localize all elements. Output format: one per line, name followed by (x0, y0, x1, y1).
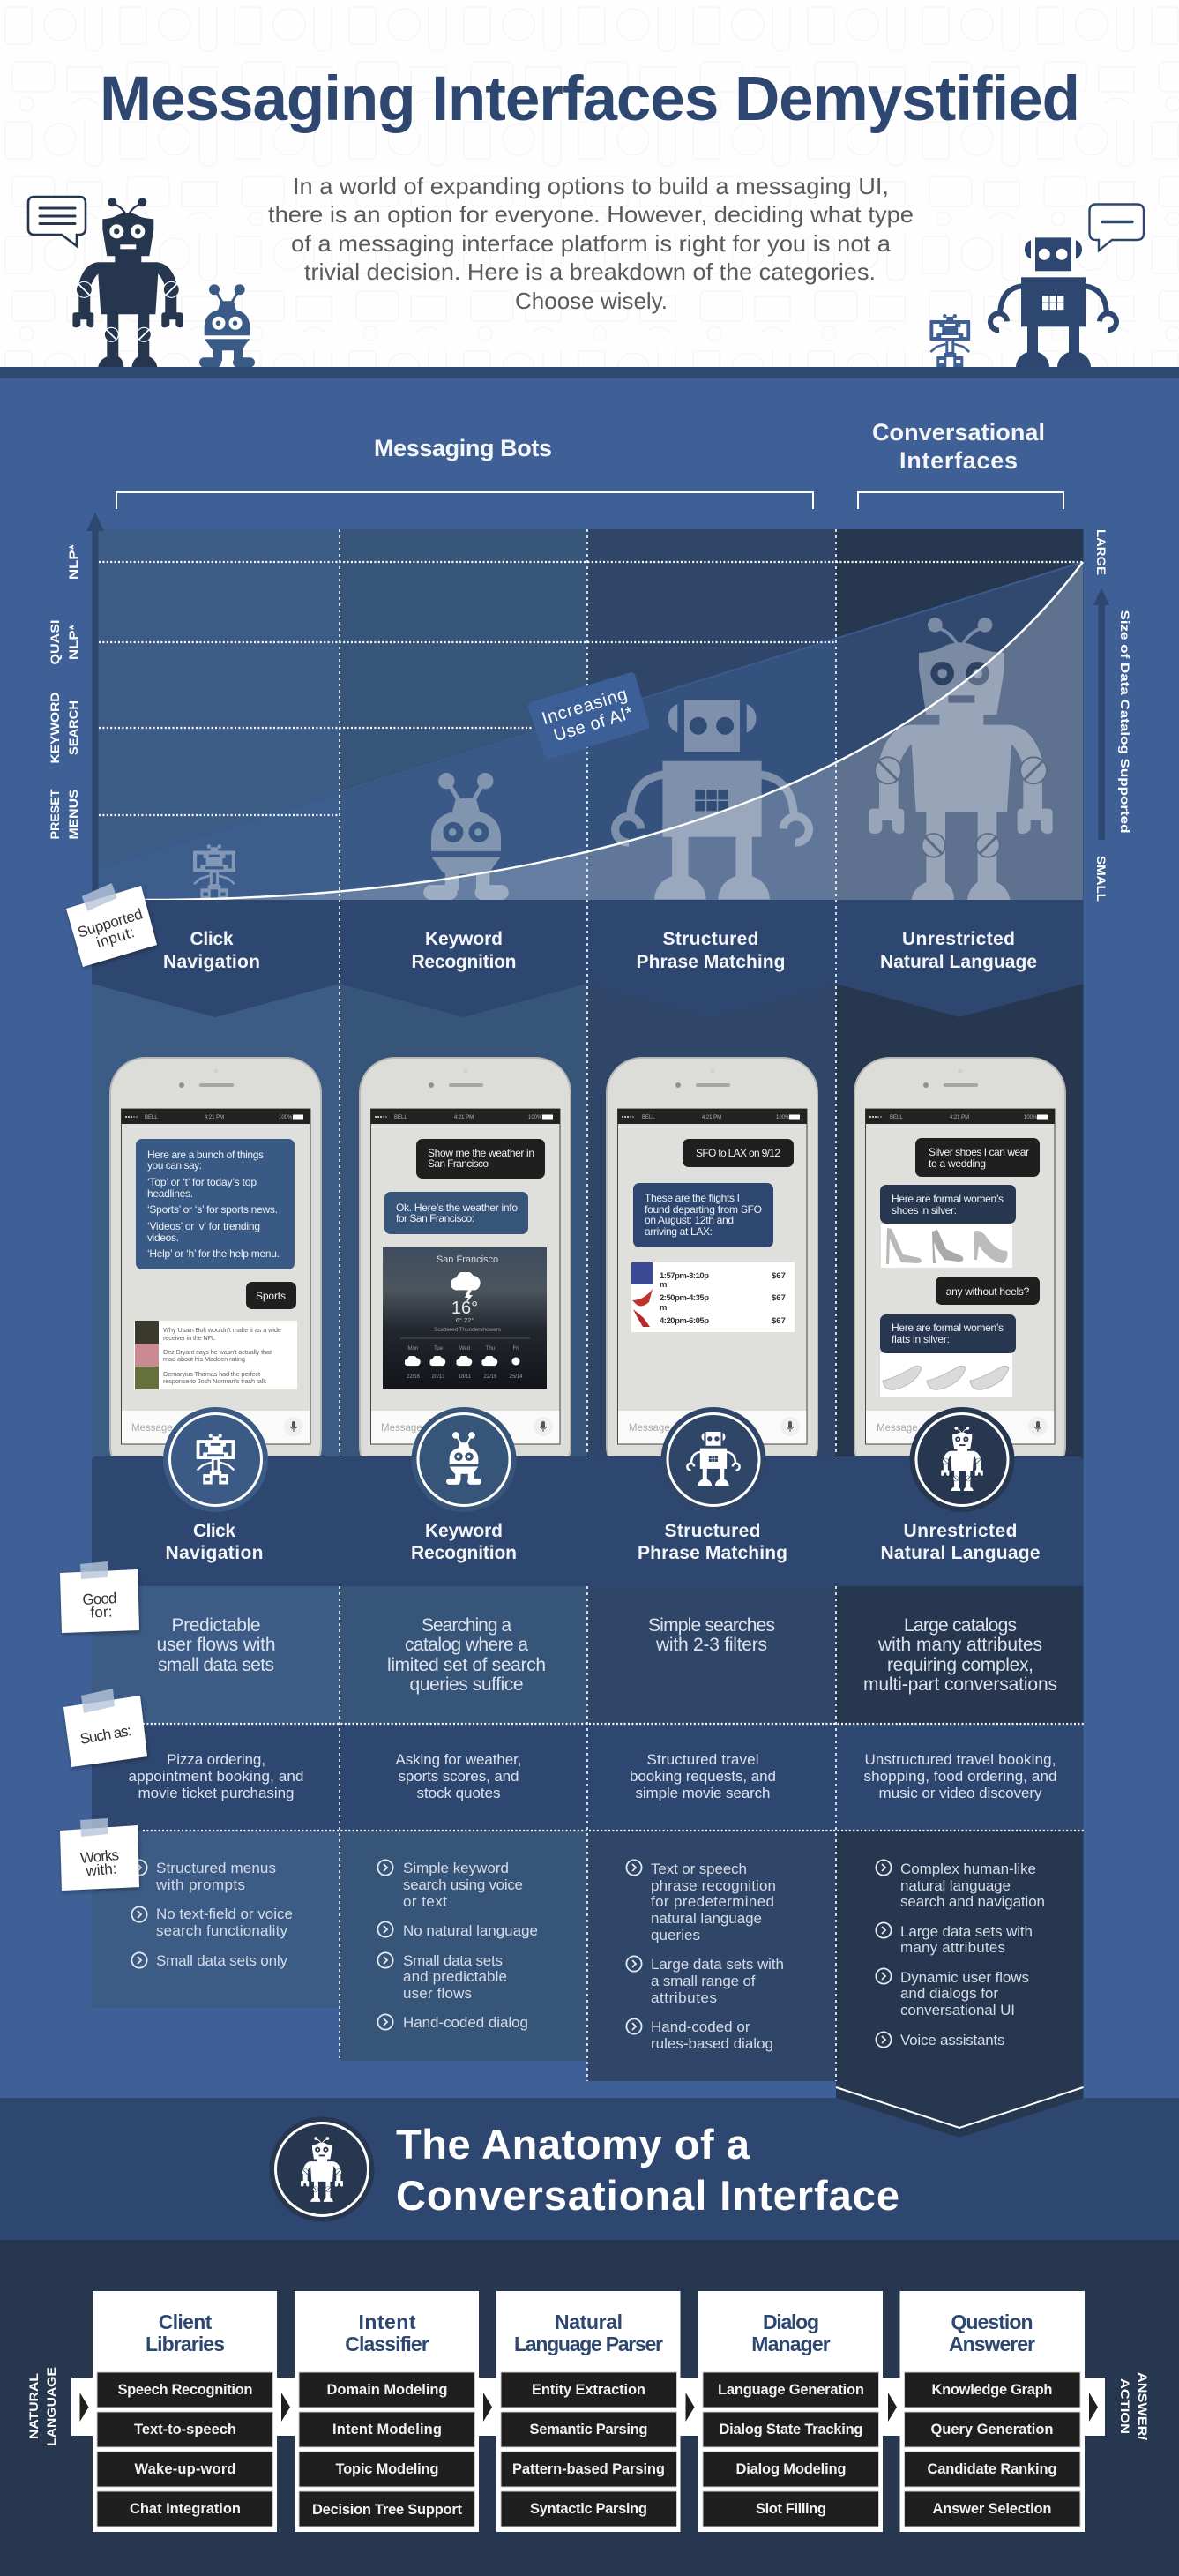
row: such as: sports scores, and (399, 1768, 519, 1785)
weather card: Fri (513, 1346, 519, 1352)
icon: chart robot structured (616, 700, 809, 899)
row: works with, unrestricted natural language (876, 1860, 1045, 2048)
bot message (136, 1139, 295, 1269)
row: works with, click navigation: Small data sets only (156, 1952, 287, 1969)
bot message: These are the flights I (645, 1192, 740, 1204)
phone: unrestricted natural language: BELL (890, 1115, 903, 1120)
weather card: Wed (459, 1346, 470, 1352)
row: works with, click navigation (131, 1860, 293, 1969)
row: works with, keyword recognition: and predictable (403, 1968, 507, 1985)
phone: keyword recognition (360, 1058, 571, 1481)
badge: click navigation (163, 1407, 268, 1512)
flights card (631, 1262, 795, 1332)
such-as band (92, 1724, 1083, 1831)
row: such as (129, 1751, 1056, 1801)
weather card: 25/14 (509, 1374, 523, 1380)
note: works with: Works (79, 1846, 120, 1867)
intro text: trivial decision. Here is a breakdown of the categories. (304, 258, 876, 285)
vertical axis: NLP scale: KEYWORD (48, 692, 62, 764)
intro text: In a world of expanding options to build a messaging UI, (293, 173, 889, 199)
user message: SFO to LAX on 9/12 (696, 1147, 780, 1159)
bot message (880, 1185, 1016, 1224)
phone: click navigation: Message... (131, 1423, 181, 1434)
weather card: 22/16 (407, 1374, 421, 1380)
weather card: Tue (434, 1346, 444, 1352)
phone: unrestricted natural language (854, 1058, 1065, 1481)
phone: keyword recognition: Message... (381, 1423, 430, 1434)
panel: intent classifier: Classifier (345, 2333, 429, 2355)
vertical axis: data catalog size: Size of Data Catalog Supported (1118, 610, 1132, 833)
panel: natural language parser: Semantic Parsing (529, 2422, 647, 2437)
row: works with, keyword recognition: Simple keyword (403, 1860, 509, 1876)
row: works with, keyword recognition: No natural language (403, 1922, 538, 1939)
flights card: $67 (772, 1316, 786, 1326)
panel: question answerer: Answerer (949, 2333, 1035, 2355)
note: supported input: Supported (76, 905, 145, 941)
supported input labels: Unrestricted (902, 929, 1015, 949)
bot message: ‘Sports’ or ‘s’ for sports news. (147, 1203, 278, 1216)
weather card: 20/13 (431, 1374, 445, 1380)
panel: natural language parser: Entity Extraction (532, 2382, 645, 2398)
row: good for: multi-part conversations (863, 1674, 1057, 1695)
news card: Dez Bryant says he wasn't actually that (163, 1348, 272, 1356)
phone: unrestricted natural language: 100% (1024, 1115, 1038, 1120)
news card (134, 1321, 297, 1389)
note: good for: Good (82, 1590, 117, 1608)
note: good for: for: (90, 1603, 113, 1621)
note: such as: Such as: (78, 1722, 133, 1748)
bot message: Ok. Here’s the weather info (396, 1202, 518, 1214)
row: good for: Searching a (422, 1615, 511, 1636)
weather card: 18/11 (459, 1374, 472, 1380)
pipeline connectors (71, 2378, 1105, 2436)
phone: structured phrase matching (607, 1058, 817, 1481)
news card: response to Josh Norman's trash talk (163, 1377, 266, 1385)
panel: question answerer: Candidate Ranking (928, 2461, 1056, 2477)
row: good for: with many attributes (877, 1635, 1042, 1655)
row: works with, click navigation: with prompts (155, 1876, 245, 1893)
row: works with, structured phrase matching: natural language (651, 1910, 762, 1927)
user message: Show me the weather in (428, 1147, 534, 1159)
row: good for: user flows with (157, 1635, 275, 1655)
category labels: Keyword (425, 1521, 503, 1541)
title: Messaging Interfaces Demystified (100, 64, 1080, 134)
bot message (384, 1192, 528, 1234)
intro text (268, 173, 914, 314)
label: answer or action output (1118, 2372, 1150, 2440)
news card: mad about his Madden rating (163, 1355, 245, 1363)
panel: question answerer: Question (951, 2310, 1033, 2333)
category labels: Phrase Matching (638, 1543, 787, 1563)
chevron outline (836, 2087, 1083, 2128)
row: works with, unrestricted natural language: Voice assistants (900, 2032, 1005, 2048)
panel: question answerer: Knowledge Graph (931, 2382, 1053, 2398)
row: good for: queries suffice (409, 1674, 524, 1695)
badge: structured phrase matching (661, 1407, 765, 1512)
bot message (880, 1314, 1016, 1353)
bot message: headlines. (147, 1187, 193, 1200)
icon: chart robot conversational (869, 618, 1053, 900)
vertical axis: NLP scale: SEARCH (66, 700, 80, 755)
panel: natural language parser (496, 2291, 681, 2532)
phone: keyword recognition: BELL (394, 1115, 407, 1120)
increasing AI wedge (92, 562, 1083, 900)
shoes row (880, 1353, 1012, 1397)
intro text: of a messaging interface platform is right for you is not a (291, 230, 892, 257)
user message (915, 1138, 1040, 1177)
row: such as: appointment booking, and (129, 1768, 303, 1785)
panel: intent classifier: Decision Tree Support (312, 2502, 462, 2518)
intro text: Choose wisely. (515, 288, 668, 314)
icon: robot conversational (72, 198, 183, 367)
row: such as: Asking for weather, (395, 1751, 522, 1768)
row: works with, click navigation: No text-field or voice (156, 1906, 293, 1922)
user message: San Francisco (428, 1157, 489, 1170)
row: works with, keyword recognition: or text (403, 1893, 447, 1910)
row: good for: Simple searches (648, 1615, 775, 1636)
bot message: arriving at LAX: (645, 1225, 713, 1238)
row: works with, unrestricted natural language: Dynamic user flows (900, 1969, 1029, 1986)
panel: dialog manager: Dialog State Tracking (720, 2422, 862, 2437)
weather card: Mon (408, 1346, 418, 1352)
row: works with, unrestricted natural language: many attributes (900, 1939, 1005, 1956)
row: works with, structured phrase matching: Text or speech (651, 1861, 747, 1877)
bot message (633, 1183, 773, 1247)
panel: question answerer (899, 2291, 1085, 2532)
flights card: 1:57pm-3:10p (660, 1271, 709, 1281)
category labels: Natural Language (880, 1543, 1041, 1563)
row: good for: requiring complex, (887, 1655, 1033, 1675)
badge: unrestricted natural language (910, 1407, 1014, 1512)
header (0, 0, 1179, 378)
bot message: Here are formal women’s (892, 1193, 1004, 1205)
category labels: Navigation (166, 1543, 263, 1563)
panel: client libraries: Speech Recognition (118, 2382, 252, 2398)
label: natural language input (26, 2367, 58, 2446)
row: works with, unrestricted natural language: conversational UI (900, 2002, 1015, 2018)
panel: natural language parser: Syntactic Parsing (530, 2501, 647, 2517)
row: works with, unrestricted natural language: Large data sets with (900, 1923, 1033, 1940)
vertical axis: NLP scale: QUASI (48, 619, 62, 665)
shoes row (881, 1224, 1012, 1268)
icon: robot click (929, 314, 970, 367)
row: good for: small data sets (158, 1655, 274, 1675)
user message (246, 1282, 296, 1309)
row: such as: shopping, food ordering, and (864, 1768, 1056, 1785)
panel: natural language parser: Language Parser (514, 2333, 663, 2355)
phone: click navigation: BELL (145, 1115, 158, 1120)
note: good for (60, 1561, 139, 1633)
anatomy heading: The Anatomy of a (396, 2121, 750, 2168)
phone: keyword recognition: 100% (528, 1115, 542, 1120)
user message: to a wedding (929, 1157, 986, 1170)
supported input labels: Keyword (425, 929, 503, 949)
panel: dialog manager: Dialog Modeling (735, 2461, 847, 2477)
row: such as: music or video discovery (878, 1785, 1042, 1801)
category labels: Recognition (411, 1543, 517, 1563)
user message: Silver shoes I can wear (929, 1146, 1029, 1158)
weather card (383, 1247, 547, 1389)
row: works with, keyword recognition: user flows (403, 1985, 472, 2002)
note: such as (63, 1689, 147, 1767)
panel: client libraries: Text-to-speech (134, 2422, 236, 2437)
bottom section background (0, 2240, 1179, 2576)
panel: client libraries (93, 2291, 277, 2532)
flights card: m (660, 1303, 667, 1313)
vertical axis: data catalog size: LARGE (1094, 529, 1108, 575)
supported input labels: Click (190, 929, 234, 949)
row: works with, click navigation: Structured menus (156, 1860, 276, 1876)
row: such as: booking requests, and (630, 1768, 776, 1785)
supported input labels: Phrase Matching (637, 952, 785, 972)
label: answer or action output: ANSWER/ (1136, 2372, 1150, 2440)
category labels (166, 1521, 1041, 1563)
category labels: Click (193, 1521, 235, 1541)
bot message: ‘Help’ or ‘h’ for the help menu. (147, 1247, 280, 1260)
panel: natural language parser: Natural (555, 2310, 623, 2333)
heading: conversational interfaces: Interfaces (899, 447, 1018, 474)
band: categories (92, 1456, 1083, 1586)
heading: messaging bots: Messaging Bots (374, 435, 552, 461)
anatomy heading: Conversational Interface (396, 2172, 899, 2219)
icon: speech bubble left (28, 197, 86, 246)
icon: robot structured (990, 237, 1116, 367)
icon: anatomy badge (270, 2117, 374, 2221)
category labels: Unrestricted (903, 1521, 1018, 1541)
icon: chart robot click (193, 844, 235, 900)
row: such as: Structured travel (647, 1751, 758, 1768)
phone: structured phrase matching: Message... (629, 1423, 678, 1434)
heading: messaging bots (116, 435, 813, 509)
news card: receiver in the NFL (163, 1334, 215, 1342)
supported input labels: Navigation (163, 952, 260, 972)
supported input labels (163, 929, 1037, 972)
supported input labels: Recognition (411, 952, 517, 972)
bot message: flats in silver: (892, 1333, 950, 1345)
icon: chart robot keyword (423, 773, 509, 900)
label: answer or action output: ACTION (1118, 2378, 1132, 2434)
row: good for: limited set of search (387, 1655, 546, 1675)
news card: Demaryius Thomas had the perfect (163, 1370, 260, 1378)
supported input labels: Structured (663, 929, 758, 949)
user message (416, 1139, 545, 1179)
vertical axis: NLP scale: PRESET (48, 789, 62, 840)
row: such as: Unstructured travel booking, (864, 1751, 1056, 1768)
row: such as: Pizza ordering, (167, 1751, 265, 1768)
flights card: 4:20pm-6:05p (660, 1316, 709, 1326)
label: increasing use of AI: Use of AI* (551, 703, 636, 745)
category labels: Structured (665, 1521, 760, 1541)
label: natural language input: LANGUAGE (44, 2367, 58, 2446)
row: works with, click navigation: search functionality (156, 1922, 287, 1939)
bot message: for San Francisco: (396, 1212, 474, 1224)
heading: conversational interfaces: Conversational (872, 419, 1045, 446)
phone: unrestricted natural language: 4:21 PM (950, 1115, 969, 1120)
phone: structured phrase matching: 100% (776, 1115, 790, 1120)
user message: any without heels? (946, 1285, 1030, 1298)
row: good for: catalog where a (405, 1635, 528, 1655)
column dividers lower (340, 1586, 836, 2081)
panel: client libraries: Libraries (146, 2333, 225, 2355)
flights card: 2:50pm-4:35p (660, 1293, 709, 1303)
panel: question answerer: Answer Selection (933, 2501, 1051, 2517)
row: works with, keyword recognition (377, 1860, 538, 2031)
row: good for: Predictable (171, 1615, 261, 1636)
flights card: $67 (772, 1293, 786, 1303)
supported input chevrons (92, 900, 1083, 1017)
user message (936, 1277, 1040, 1305)
vertical axis: NLP scale: MENUS (66, 789, 80, 840)
flights card: m (660, 1280, 667, 1290)
panel: client libraries: Chat Integration (130, 2501, 241, 2517)
label: natural language input: NATURAL (26, 2373, 41, 2439)
user message: Sports (256, 1290, 286, 1302)
news card: Why Usain Bolt wouldn't make it as a wide (163, 1326, 281, 1334)
intro text: there is an option for everyone. However, deciding what type (268, 201, 914, 228)
weather card: Thu (486, 1346, 495, 1352)
row: such as: simple movie search (635, 1785, 771, 1801)
row: works with, keyword recognition: Small data sets (403, 1952, 503, 1969)
panel: dialog manager: Slot Filling (756, 2501, 826, 2517)
vertical axis: data catalog size (1093, 529, 1132, 902)
panel: intent classifier: Topic Modeling (335, 2461, 439, 2477)
badge: keyword recognition (411, 1407, 517, 1512)
column panels (92, 529, 1083, 2138)
row: such as: movie ticket purchasing (138, 1785, 295, 1801)
row: works with, structured phrase matching: Large data sets with (651, 1956, 784, 1973)
phone: keyword recognition: 4:21 PM (454, 1115, 474, 1120)
row: works with, keyword recognition: Hand-coded dialog (403, 2014, 528, 2031)
row: works with, structured phrase matching: queries (651, 1927, 700, 1943)
panel: client libraries: Client (159, 2310, 213, 2333)
panel: client libraries: Wake-up-word (134, 2461, 236, 2477)
vertical axis: NLP scale (48, 513, 104, 891)
panel: dialog manager: Dialog (763, 2310, 819, 2333)
icon: speech bubble right (1090, 205, 1144, 251)
user message (683, 1139, 794, 1167)
row: works with, keyword recognition: search using voice (403, 1876, 523, 1893)
phone: click navigation: 4:21 PM (205, 1115, 224, 1120)
phone: unrestricted natural language: Message... (877, 1423, 926, 1434)
growth curve (145, 562, 1083, 900)
panel: natural language parser: Pattern-based Parsing (512, 2461, 665, 2477)
row: works with, unrestricted natural language: and dialogs for (900, 1985, 998, 2002)
weather card: 22/16 (483, 1374, 497, 1380)
bot message: videos. (147, 1232, 179, 1244)
panel: intent classifier (295, 2291, 479, 2532)
row: works with, unrestricted natural language: Complex human-like (900, 1861, 1036, 1877)
weather card: 16° (451, 1299, 478, 1318)
heading: conversational interfaces (858, 419, 1063, 509)
panel: intent classifier: Domain Modeling (326, 2382, 448, 2398)
bot message: ‘Top’ or ‘t’ for today’s top (147, 1176, 257, 1188)
supported input labels: Natural Language (880, 952, 1037, 972)
panel: dialog manager: Language Generation (718, 2382, 864, 2398)
weather card: 6° 22° (456, 1316, 474, 1324)
panel: dialog manager: Manager (751, 2333, 831, 2355)
panel: question answerer: Query Generation (931, 2422, 1053, 2437)
anatomy heading (270, 2117, 899, 2221)
row: works with, structured phrase matching (626, 1860, 784, 2052)
vertical axis: NLP scale: NLP* (66, 624, 80, 660)
anatomy band (0, 2098, 1179, 2240)
note: works with (60, 1818, 139, 1891)
note: supported input (66, 883, 157, 967)
bot message: on August: 12th and (645, 1214, 734, 1226)
bot message: Here are a bunch of things (147, 1149, 264, 1161)
chart: data size vs AI use (92, 562, 1083, 900)
row: such as: stock quotes (416, 1785, 501, 1801)
weather card: San Francisco (437, 1254, 498, 1265)
row: good for: with 2-3 filters (655, 1635, 767, 1655)
phone: structured phrase matching: BELL (642, 1115, 655, 1120)
label: increasing use of AI: Increasing (540, 685, 630, 729)
ground bar (0, 367, 1179, 378)
vertical axis: data catalog size: SMALL (1094, 856, 1108, 902)
label: increasing use of AI (528, 672, 649, 759)
bot message: found departing from SFO (645, 1203, 762, 1216)
icon: robot keyword (199, 284, 255, 367)
note: supported input: input: (94, 924, 137, 951)
bot message: Here are formal women’s (892, 1322, 1004, 1334)
panel: intent classifier: Intent Modeling (332, 2422, 442, 2437)
row: good for: Large catalogs (904, 1615, 1017, 1636)
phone: click navigation: 100% (279, 1115, 293, 1120)
phone: structured phrase matching: 4:21 PM (702, 1115, 721, 1120)
row: works with, structured phrase matching: a small range of (651, 1973, 756, 1989)
bot message: you can say: (147, 1159, 202, 1172)
row: works with, structured phrase matching: for predetermined (651, 1893, 774, 1910)
panel: intent classifier: Intent (358, 2310, 416, 2333)
row: works with, unrestricted natural language: natural language (900, 1877, 1011, 1894)
bot message: shoes in silver: (892, 1204, 957, 1217)
column dividers top (340, 529, 836, 1464)
row: works with, structured phrase matching: Hand-coded or (651, 2018, 750, 2035)
row: works with, structured phrase matching: rules-based dialog (651, 2035, 773, 2052)
row: works with, unrestricted natural language: search and navigation (900, 1893, 1045, 1910)
phone: click navigation (110, 1058, 321, 1481)
row: good for (157, 1615, 1057, 1695)
bot message: ‘Videos’ or ‘v’ for trending (147, 1220, 260, 1232)
weather card: Scattered Thundershowers (434, 1327, 502, 1333)
panel: dialog manager (698, 2291, 883, 2532)
vertical axis: NLP scale: NLP* (66, 543, 80, 580)
note: works with: with: (85, 1861, 117, 1880)
row: works with, structured phrase matching: attributes (651, 1989, 717, 2006)
row: works with, structured phrase matching: phrase recognition (651, 1877, 776, 1894)
flights card: $67 (772, 1271, 786, 1281)
